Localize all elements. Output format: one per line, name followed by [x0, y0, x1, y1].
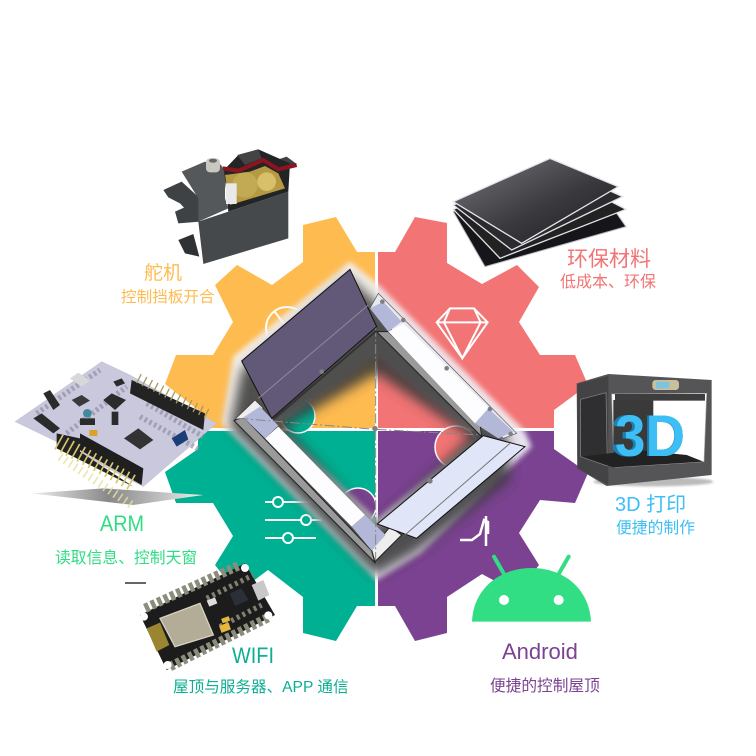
nodemcu pin rows	[145, 565, 270, 667]
gear quadrant: yellow	[165, 217, 375, 428]
icon: diamond	[437, 308, 488, 358]
board middle components	[43, 378, 126, 425]
image: 3D printer	[577, 374, 713, 486]
nodemcu holes	[140, 564, 272, 669]
label: servo: 舵机	[144, 262, 182, 284]
printer bed	[582, 450, 703, 467]
nodemcu usb	[252, 580, 269, 601]
board small chip	[72, 395, 90, 407]
servo red band	[223, 160, 297, 171]
puzzle knob: green into yellow	[281, 399, 315, 433]
servo shaft	[203, 158, 223, 179]
printer display	[652, 380, 679, 390]
printer inner column	[613, 400, 653, 457]
label: Android: 便捷的控制屋顶	[490, 677, 600, 695]
label: WIFI	[173, 643, 349, 696]
3D model: roof frame	[222, 262, 532, 580]
printer body	[577, 374, 712, 486]
white band: lower left	[265, 427, 365, 527]
frame joints	[319, 299, 513, 484]
printer left window	[581, 393, 607, 466]
nodemcu chip	[230, 588, 248, 606]
label: WIFI: WIFI	[232, 643, 274, 668]
label: servo: 控制挡板开合	[121, 288, 215, 306]
divider dash	[125, 582, 146, 584]
nodemcu pcb	[140, 563, 275, 670]
frame shadow	[230, 277, 510, 575]
image: acrylic sheets	[453, 158, 626, 267]
frame halo	[222, 262, 532, 580]
label: 3D printing	[615, 493, 695, 537]
label: Android: Android	[502, 639, 578, 664]
frame wall: upper right	[377, 332, 482, 437]
label: material: 环保材料	[567, 248, 651, 271]
puzzle knob: red into purple	[435, 426, 477, 468]
nodemcu antenna	[147, 623, 169, 652]
board shadow	[32, 488, 203, 505]
3D lettering: 3D	[615, 404, 685, 469]
nodemcu wifi module	[160, 603, 213, 647]
frame detail: centre lines	[238, 327, 480, 560]
image: NodeMCU board	[140, 563, 275, 670]
label: servo	[121, 262, 215, 306]
board pcb	[15, 362, 217, 487]
nodemcu capacitors	[219, 616, 231, 633]
top sheet	[453, 158, 618, 243]
icon: Android	[472, 557, 591, 622]
label: material	[560, 248, 656, 291]
image: servo	[163, 149, 297, 264]
board connector	[70, 373, 90, 387]
label: ARM: 读取信息、控制天窗	[55, 549, 197, 567]
label: material: 低成本、环保	[560, 273, 656, 291]
gear graphic	[165, 217, 588, 641]
board logo	[172, 430, 188, 447]
frame wall: left corner	[235, 400, 263, 419]
board main chip	[124, 428, 153, 449]
board traces	[37, 370, 203, 450]
board lower header	[80, 433, 143, 485]
servo body	[198, 192, 288, 264]
dark flap	[242, 269, 377, 419]
label: 3D printing: 3D 打印	[615, 493, 686, 516]
printer right window	[612, 393, 707, 467]
board pins	[60, 457, 132, 505]
gear quadrant: green	[165, 431, 375, 641]
label: Android	[490, 639, 600, 695]
servo upper housing	[182, 162, 228, 222]
label: ARM	[55, 511, 197, 567]
frame corners	[243, 302, 513, 551]
board capacitor	[89, 430, 97, 436]
servo label	[237, 149, 262, 165]
white band: upper right	[388, 323, 489, 423]
gear quadrant: red	[378, 217, 588, 428]
icon: steering wheel	[266, 307, 308, 349]
printer shadow	[593, 477, 713, 486]
frame wall: bottom corner	[372, 527, 402, 562]
gear quadrant: purple	[378, 431, 588, 641]
image: development board	[15, 362, 217, 505]
frame wall: lower left	[234, 417, 375, 563]
servo ears	[163, 182, 200, 223]
puzzle knob: purple into green	[340, 488, 376, 524]
icon: sliders	[265, 497, 322, 543]
frame wall: top outer	[370, 293, 517, 438]
board upper header	[130, 380, 205, 430]
nodemcu regulator	[207, 597, 217, 607]
light flap	[377, 436, 525, 538]
board left header	[33, 413, 60, 433]
label: ARM: ARM	[100, 511, 144, 536]
icon: thumb	[460, 516, 488, 546]
label: WIFI: 屋顶与服务器、APP 通信	[173, 678, 349, 696]
servo gears	[225, 166, 285, 205]
3D lettering: 3D	[611, 404, 685, 469]
label: 3D printing: 便捷的制作	[616, 519, 695, 537]
